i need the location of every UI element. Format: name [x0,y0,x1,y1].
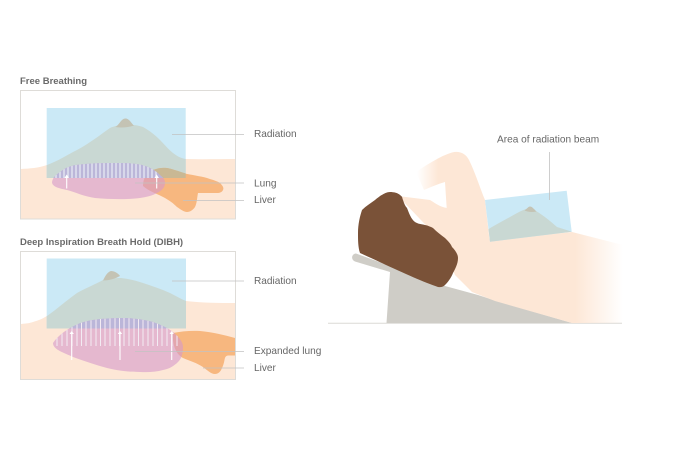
lilac band [54,163,164,178]
lung [52,163,165,199]
panel frame [20,90,236,219]
nipple [103,271,120,280]
hair [358,192,458,287]
torso [398,196,623,323]
radiation field [47,108,186,178]
baseline [328,322,622,324]
leader lines: free breathing [135,134,244,200]
body tissue [21,271,235,379]
breast within radiation field [46,125,186,178]
motion arrows [64,174,159,188]
body tissue [21,118,235,218]
heading: Free Breathing: Free Breathing [20,76,87,87]
label: Expanded lung: Expanded lung [254,346,321,357]
illustration: patient lying on wedge [328,152,623,323]
liver [143,168,223,212]
radiation beam area [485,191,572,242]
breast inside beam [488,209,572,242]
panel frame [20,252,236,380]
wedge support [352,254,572,323]
lung overlap with radiation [54,163,164,178]
lung motion stripes [57,315,177,346]
label: Radiation: Radiation [254,276,297,287]
label: Lung: Lung [254,178,276,190]
motion arrows [70,331,174,360]
leader line: beam [548,152,550,200]
label: Liver: Liver [254,195,277,206]
lilac band [70,318,166,328]
heading: DIBH: Deep Inspiration Breath Hold (DIBH) [20,237,183,248]
liver overlap with radiation [154,168,186,178]
label: Liver: Liver [254,363,277,374]
panel: free breathing diagram [20,90,236,219]
liver [173,331,235,374]
panel: DIBH diagram [20,252,236,380]
nipple [524,206,536,212]
label: Radiation: Radiation [254,129,297,140]
lung detail [56,318,178,346]
lung motion stripes [55,163,157,178]
radiation field [47,258,186,328]
leader lines: DIBH [135,281,244,368]
raised arm [416,152,490,244]
label: Area of radiation beam: Area of radiation beam [497,134,599,146]
nipple [116,118,134,128]
expanded lung [53,318,183,372]
breast within radiation field [46,278,186,328]
